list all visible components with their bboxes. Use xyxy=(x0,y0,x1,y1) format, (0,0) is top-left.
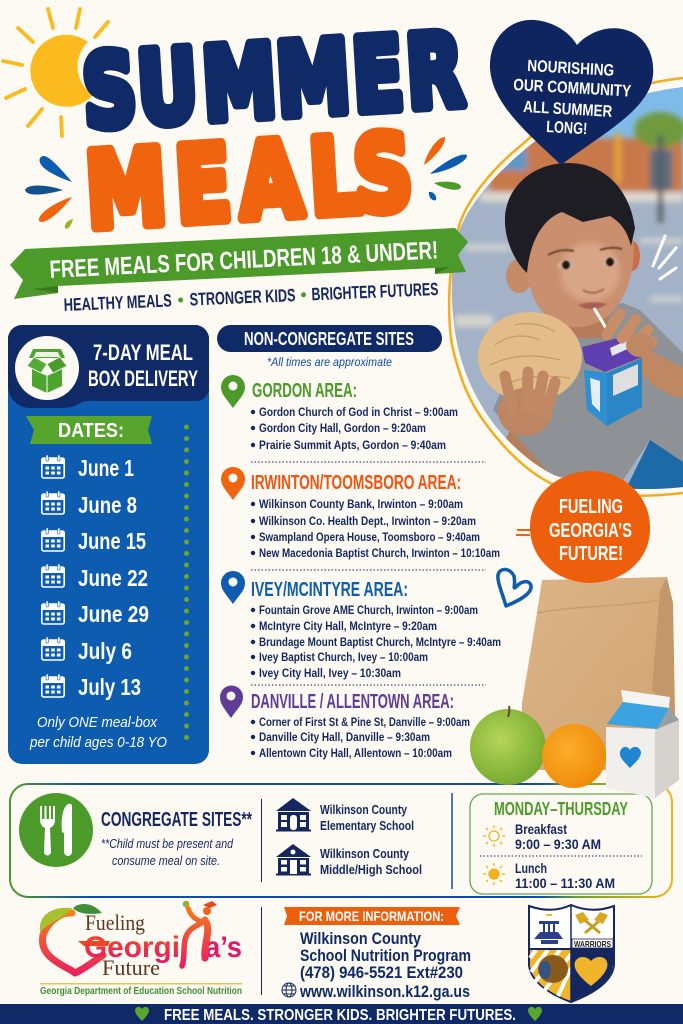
date list: June 29 xyxy=(78,601,149,627)
contact details xyxy=(282,929,471,1001)
panel header: 7-DAY MEAL xyxy=(93,340,193,365)
section: Irwinton/Toomsboro area xyxy=(221,467,500,560)
section: Gordon area: GORDON AREA: xyxy=(252,380,357,402)
section: Irwinton/Toomsboro area: Swampland Opera House, Toomsboro – 9:40am xyxy=(259,530,480,544)
footer band: FREE MEALS. STRONGER KIDS. BRIGHTER FUTURES. xyxy=(164,1007,516,1024)
tagline xyxy=(63,279,439,315)
note: one meal box: Only ONE meal-box xyxy=(37,714,157,731)
tagline: BRIGHTER FUTURES xyxy=(311,279,439,304)
note: one meal box: per child ages 0-18 YO xyxy=(29,734,167,751)
section: Danville/Allentown area: DANVILLE / ALLENTOWN AREA: xyxy=(251,691,454,713)
face xyxy=(525,205,634,327)
meal times box xyxy=(470,794,652,894)
right arm and hand xyxy=(636,352,683,398)
icon: globe xyxy=(282,983,296,997)
quadrant: pillar xyxy=(534,915,563,944)
motion lines xyxy=(653,236,676,279)
badge: fueling Georgia's future: GEORGIA’S xyxy=(549,520,632,542)
section: Ivey/McIntyre area xyxy=(221,571,501,680)
contact details: School Nutrition Program xyxy=(300,946,471,965)
logo: Fueling Georgia's Future: Fueling xyxy=(85,910,145,935)
panel header xyxy=(8,325,209,408)
shorts xyxy=(628,440,683,489)
panel: meal box delivery xyxy=(8,325,209,764)
right hand fingers xyxy=(607,314,652,348)
date list xyxy=(42,455,149,700)
section: Irwinton/Toomsboro area: New Macedonia Baptist Church, Irwinton – 10:10am xyxy=(259,546,500,560)
heading: non-congregate sites xyxy=(217,325,442,352)
logo: Fueling Georgia's Future: a’s xyxy=(205,931,242,964)
neck xyxy=(568,315,609,338)
middle/high school name: Middle/High School xyxy=(320,862,422,877)
congregate heading and note xyxy=(101,808,252,868)
logo: Fueling Georgia's Future: Georgi xyxy=(84,931,180,964)
eyes and mouth xyxy=(548,248,622,309)
badge: fueling Georgia's future: FUTURE! xyxy=(559,543,623,565)
date list: June 8 xyxy=(78,492,137,518)
tagline: HEALTHY MEALS xyxy=(63,290,172,315)
dates ribbon: DATES: xyxy=(58,420,124,442)
bun xyxy=(478,312,582,402)
heading: non-congregate sites: NON-CONGREGATE SITES xyxy=(244,328,414,349)
note: one meal box xyxy=(29,714,167,751)
left hand and wrist xyxy=(506,432,549,472)
section: Ivey/McIntyre area: Brundage Mount Baptist Church, McIntyre – 9:40am xyxy=(259,635,501,649)
logo: Fueling Georgia's Future: Georgia Department of Education School Nutrition xyxy=(40,986,242,997)
shirt xyxy=(493,303,683,480)
quadrant: crossed axes xyxy=(575,912,608,933)
section: Ivey/McIntyre area: McIntyre City Hall, McIntyre – 9:20am xyxy=(259,619,437,633)
title: SUMMER: SUMMER xyxy=(79,11,467,151)
section: Ivey/McIntyre area: Fountain Grove AME Church, Irwinton – 9:00am xyxy=(259,603,478,617)
callout: heart: ALL SUMMER xyxy=(523,98,613,121)
date list: July 6 xyxy=(78,638,132,664)
title: MEALS: MEALS xyxy=(82,111,416,252)
ears xyxy=(506,260,530,293)
elementary school name xyxy=(320,802,414,833)
icon: elementary school xyxy=(276,798,311,832)
callout: heart xyxy=(490,20,653,165)
middle/high school name xyxy=(320,846,422,877)
shield: Wilkinson County xyxy=(529,905,614,1002)
juice box xyxy=(582,335,642,426)
image: paper lunch bag xyxy=(522,577,675,770)
section: Gordon area: Prairie Summit Apts, Gordon – 9:40am xyxy=(259,438,446,452)
logo: Fueling Georgia's Future: Future xyxy=(102,955,160,980)
congregate heading and note: **Child must be present and xyxy=(101,837,234,851)
date list: July 13 xyxy=(78,674,141,700)
dates ribbon xyxy=(26,416,152,444)
section: Danville/Allentown area xyxy=(220,686,470,760)
icon: fork and knife xyxy=(19,793,93,867)
note: times approximate: *All times are approximate xyxy=(267,355,392,369)
tagline: STRONGER KIDS xyxy=(189,285,296,310)
contact details: Wilkinson County xyxy=(300,929,421,948)
section: Gordon area xyxy=(221,375,458,452)
section: Ivey/McIntyre area: IVEY/MCINTYRE AREA: xyxy=(251,579,408,601)
contact details: www.wilkinson.k12.ga.us xyxy=(299,982,470,1001)
ribbon: for more information: FOR MORE INFORMATION: xyxy=(299,908,444,924)
meal times box: Lunch xyxy=(515,860,547,876)
logo: Fueling Georgia's Future xyxy=(40,901,242,997)
image: milk carton xyxy=(606,690,679,798)
section: Danville/Allentown area: Corner of First St & Pine St, Danville – 9:00am xyxy=(259,715,470,729)
section: Ivey/McIntyre area: Ivey City Hall, Ivey – 10:30am xyxy=(259,666,401,680)
icon: middle/high school xyxy=(276,844,311,876)
section: Gordon area: Gordon City Hall, Gordon – 9:20am xyxy=(259,421,426,435)
meal times box: MONDAY–THURSDAY xyxy=(494,799,628,819)
callout: heart: OUR COMMUNITY xyxy=(513,76,632,101)
panel header: BOX DELIVERY xyxy=(88,366,198,391)
congregate heading and note: CONGREGATE SITES** xyxy=(101,808,252,831)
date list: June 1 xyxy=(78,455,134,481)
contact details: (478) 946-5521 Ext#230 xyxy=(300,963,463,982)
decorative paint splashes xyxy=(25,137,467,229)
congregate heading and note: consume meal on site. xyxy=(112,854,220,868)
icon: hand-drawn blue heart xyxy=(498,569,531,606)
meal times box: 11:00 – 11:30 AM xyxy=(515,875,615,891)
icon: sun xyxy=(3,9,108,136)
figure: running child xyxy=(182,901,217,966)
meal times box: Breakfast xyxy=(515,821,567,837)
elementary school name: Wilkinson County xyxy=(320,802,408,817)
section: Danville/Allentown area: Allentown City Hall, Allentown – 10:00am xyxy=(259,746,452,760)
section: Gordon area: Gordon Church of God in Christ – 9:00am xyxy=(259,405,458,419)
section: Ivey/McIntyre area: Ivey Baptist Church, Ivey – 10:00am xyxy=(259,650,428,664)
photo: boy with bun and juice box xyxy=(440,78,683,500)
middle/high school name: Wilkinson County xyxy=(320,846,410,861)
meal times box: 9:00 – 9:30 AM xyxy=(515,836,601,852)
quadrant: gold heart handshake xyxy=(575,957,607,986)
callout: heart: LONG! xyxy=(546,118,588,138)
warriors label: WARRIORS xyxy=(574,939,611,949)
banner: free meals: FREE MEALS FOR CHILDREN 18 & UNDER! xyxy=(49,236,439,284)
section: Irwinton/Toomsboro area: Wilkinson Co. Health Dept., Irwinton – 9:20am xyxy=(259,514,476,528)
panel: congregate sites xyxy=(10,784,672,897)
date list: June 22 xyxy=(78,565,148,591)
banner: free meals xyxy=(10,228,468,299)
section: Irwinton/Toomsboro area: Wilkinson County Bank, Irwinton – 9:00am xyxy=(259,497,463,511)
icon: outline sun xyxy=(483,825,505,847)
section: Danville/Allentown area: Danville City Hall, Danville – 9:30am xyxy=(259,730,430,744)
hair xyxy=(505,163,635,273)
icon: filled sun xyxy=(483,863,505,885)
image: orange xyxy=(542,724,606,788)
quadrant: mascot xyxy=(538,955,568,983)
badge: fueling Georgia's future: FUELING xyxy=(559,496,623,518)
badge: fueling Georgia's future xyxy=(516,471,650,583)
elementary school name: Elementary School xyxy=(320,818,414,833)
icon: meal box xyxy=(15,336,79,400)
image: green apple xyxy=(470,706,546,785)
section: Irwinton/Toomsboro area: IRWINTON/TOOMSBORO AREA: xyxy=(251,472,461,494)
date list: June 15 xyxy=(78,528,146,554)
footer band xyxy=(0,1004,683,1024)
callout: heart: NOURISHING xyxy=(527,57,615,80)
